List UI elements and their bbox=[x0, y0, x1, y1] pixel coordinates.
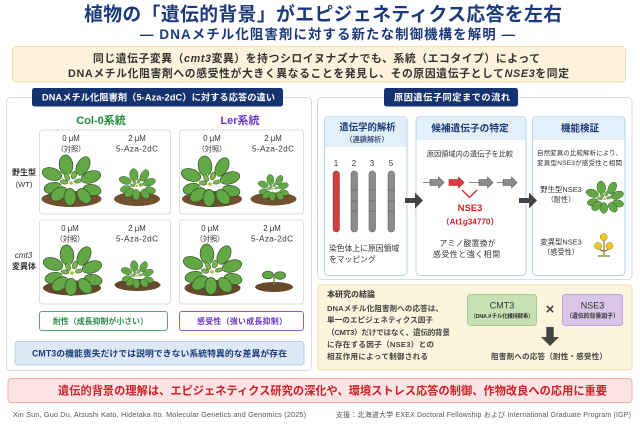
tag: tolerant: 耐性（成長抑制が小さい） bbox=[53, 316, 148, 326]
panel: gene identification flow bbox=[318, 88, 632, 280]
factor: NSE3: （遺伝的背景因子） bbox=[566, 312, 619, 320]
callout: summary bbox=[12, 46, 626, 82]
step: genetic analysis: （連鎖解析） bbox=[345, 135, 389, 144]
title: 植物の「遺伝的背景」がエピジェネティクス応答を左右 bbox=[84, 2, 562, 24]
plant: Col-0 cmt3 control bbox=[42, 244, 103, 296]
factor: NSE3: NSE3 bbox=[581, 300, 604, 310]
gene arrows bbox=[423, 177, 517, 188]
citation: Xin Sun, Guo Du, Atsushi Kato, Hidetaka Ito. Molecular Genetics and Genomics (2025) bbox=[13, 410, 306, 419]
heading: Ler: Ler系統 bbox=[220, 113, 260, 127]
funding note: 支援：北海道大学 EXEX Doctoral Fellowship および International Graduate Program (IGP) bbox=[336, 410, 631, 419]
step: candidate gene bbox=[416, 116, 526, 276]
step: genetic analysis: をマッピング bbox=[329, 254, 376, 264]
panel heading: flow: 原因遺伝子同定までの流れ bbox=[394, 92, 510, 102]
tag: sensitive bbox=[180, 312, 304, 330]
panel: Col-0 cmt3: 0 μM bbox=[61, 224, 79, 233]
plant: Col-0 WT treated bbox=[114, 168, 160, 206]
plant: Col-0 WT control bbox=[41, 154, 102, 207]
step: candidate gene: 候補遺伝子の特定 bbox=[431, 122, 509, 134]
row label: wild type: 野生型 bbox=[12, 167, 36, 177]
step: candidate gene: 感受性と強く相関 bbox=[433, 249, 500, 259]
step: functional validation: 変異型NSE3 bbox=[540, 238, 582, 246]
factor: CMT3: （DNAメチル化維持酵素） bbox=[470, 312, 534, 320]
panel: Ler cmt3: 2 μM bbox=[263, 224, 281, 233]
step: functional validation: 野生型NSE3 bbox=[540, 185, 582, 194]
panel: Ler wild type bbox=[180, 130, 304, 214]
plant: Ler WT control bbox=[180, 155, 242, 207]
multiply sign: × bbox=[546, 301, 555, 318]
panel: Ler cmt3: 5-Aza-2dC bbox=[251, 234, 293, 244]
panel: conclusion: 本研究の結論 bbox=[327, 289, 375, 299]
panel: conclusion: 単一のエピジェネティクス因子 bbox=[327, 314, 433, 324]
heading: Col-0: Col-0系統 bbox=[76, 113, 126, 127]
plant: Ler cmt3 treated seedling bbox=[255, 271, 293, 292]
panel: Col-0 cmt3 bbox=[40, 220, 170, 304]
callout: lineage difference: CMT3の機能喪失だけでは説明できない系統特異的な差異が存在 bbox=[32, 348, 287, 358]
banner: key message bbox=[8, 378, 632, 402]
panel: conclusion: （CMT3）だけではなく、遺伝的背景 bbox=[327, 327, 450, 337]
panel heading: response differences: DNAメチル化阻害剤（5-Aza-2dC）に対する応答の違い bbox=[42, 92, 275, 102]
callout: summary: DNAメチル化阻害剤への感受性が大きく異なることを発見し、その原因遺伝子としてNSE3を同定 bbox=[68, 66, 569, 80]
chromosome diagram: 5 bbox=[389, 159, 394, 168]
factor: NSE3 bbox=[562, 294, 622, 326]
factor: CMT3: CMT3 bbox=[490, 300, 514, 310]
row label: cmt3 mutant: 変異体 bbox=[12, 261, 36, 271]
plant: Ler cmt3 control bbox=[182, 243, 243, 296]
plant: mutant NSE3 bbox=[594, 234, 613, 256]
step: functional validation: （感受性） bbox=[543, 248, 579, 256]
step: functional validation: （耐性） bbox=[547, 195, 575, 204]
panel: Col-0 cmt3: （対照） bbox=[56, 234, 84, 244]
outcome text: 阻害剤への応答（耐性・感受性） bbox=[491, 351, 607, 361]
panel: conclusion: 相互作用によって制御される bbox=[327, 351, 428, 361]
callout mark: NSE3 bbox=[462, 190, 477, 198]
arrow: step 2 to 3 bbox=[519, 192, 537, 208]
chromosome diagram bbox=[333, 159, 394, 232]
step: candidate gene: NSE3 bbox=[458, 203, 482, 214]
step: candidate gene: アミノ酸置換が bbox=[440, 238, 496, 248]
panel: Ler cmt3 bbox=[180, 220, 304, 304]
arrow: step 1 to 2 bbox=[405, 192, 423, 208]
arrow: down to response bbox=[541, 327, 559, 346]
panel: Ler wild type: （対照） bbox=[198, 144, 226, 154]
row label: cmt3 mutant: cmt3 bbox=[15, 251, 33, 260]
step: genetic analysis: 遺伝学的解析 bbox=[339, 122, 396, 132]
panel: Ler wild type: 2 μM bbox=[264, 134, 282, 143]
panel: conclusion: に存在する因子（NSE3）との bbox=[327, 339, 434, 349]
plant: Ler WT treated bbox=[250, 174, 296, 206]
panel: response differences bbox=[6, 88, 312, 370]
panel: conclusion: DNAメチル化阻害剤への応答は、 bbox=[327, 303, 443, 313]
panel heading: flow bbox=[384, 88, 518, 106]
step: functional validation: 自然変異の比較解析により、 bbox=[537, 148, 622, 157]
panel: Col-0 wild type: 2 μM bbox=[128, 134, 146, 143]
panel: Col-0 wild type: （対照） bbox=[57, 144, 85, 154]
callout: summary: 同じ遺伝子変異（cmt3変異）を持つシロイヌナズナでも、系統（エコタイプ）によって bbox=[93, 51, 540, 65]
subtitle: — DNAメチル化阻害剤に対する新たな制御機構を解明 — bbox=[140, 26, 516, 42]
panel: Ler cmt3: 0 μM bbox=[201, 224, 219, 233]
step: functional validation: 機能検証 bbox=[561, 122, 599, 134]
step: genetic analysis: 染色体上に原因領域 bbox=[329, 243, 399, 253]
panel: Col-0 wild type: 5-Aza-2dC bbox=[116, 144, 158, 154]
row label: cmt3 mutant bbox=[12, 251, 36, 271]
step: functional validation bbox=[532, 116, 625, 276]
chromosome diagram: 3 bbox=[370, 159, 375, 168]
plant: Col-0 cmt3 treated bbox=[114, 260, 160, 291]
panel: Col-0 cmt3: 2 μM bbox=[128, 224, 146, 233]
step: functional validation: 変異型NSE3が感受性と相関 bbox=[537, 158, 622, 167]
panel: Ler wild type: 0 μM bbox=[203, 134, 221, 143]
step: candidate gene: （At1g34770） bbox=[441, 218, 499, 226]
tag: sensitive: 感受性（強い成長抑制） bbox=[197, 316, 287, 326]
panel: Col-0 wild type: 0 μM bbox=[62, 134, 80, 143]
row label: wild type bbox=[12, 167, 36, 189]
banner: key message: 遺伝的背景の理解は、エピジェネティクス研究の深化や、環境ストレス応答の制御、作物改良への応用に重要 bbox=[58, 384, 607, 398]
factor: CMT3 bbox=[468, 294, 536, 326]
panel heading: response differences bbox=[32, 88, 283, 106]
row label: wild type: (WT) bbox=[16, 180, 33, 189]
panel: Ler wild type: 5-Aza-2dC bbox=[252, 144, 294, 154]
plant: wild type NSE3 bbox=[585, 181, 625, 214]
chromosome diagram: 2 bbox=[352, 159, 357, 168]
panel: Col-0 wild type bbox=[40, 130, 170, 214]
chromosome diagram: 1 bbox=[334, 159, 339, 168]
tag: tolerant bbox=[40, 312, 168, 330]
callout: lineage difference bbox=[15, 342, 304, 365]
step: genetic analysis bbox=[324, 116, 407, 276]
panel: conclusion bbox=[318, 285, 632, 370]
step: candidate gene: 原因領域内の遺伝子を比較 bbox=[427, 150, 513, 158]
panel: Ler cmt3: （対照） bbox=[196, 234, 224, 244]
panel: Col-0 cmt3: 5-Aza-2dC bbox=[116, 234, 158, 244]
